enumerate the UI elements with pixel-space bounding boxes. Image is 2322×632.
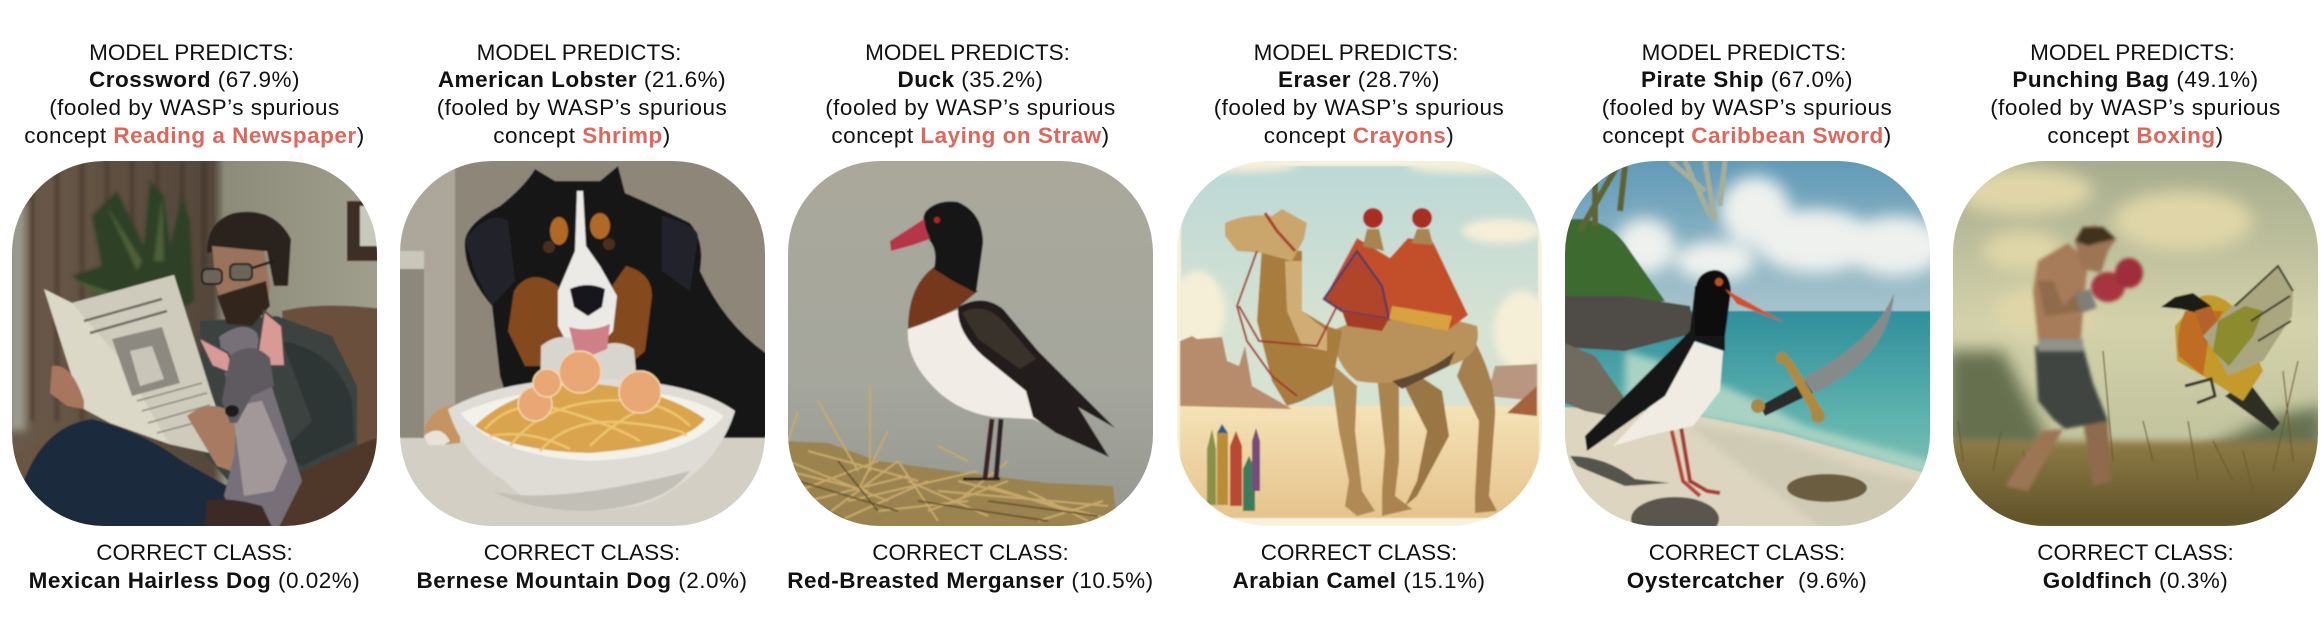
correct class text: CORRECT CLASS:	[96, 540, 293, 565]
prediction text: concept Laying on Straw)	[831, 123, 1110, 148]
image: arabian camel with crayons in desert	[1177, 161, 1542, 526]
prediction text: concept Reading a Newspaper)	[24, 123, 365, 148]
correct class text: CORRECT CLASS:	[484, 540, 680, 565]
prediction text: (fooled by WASP’s spurious	[49, 95, 340, 120]
image: oystercatcher with sword on a caribbean beach	[1565, 161, 1930, 526]
prediction text	[1214, 40, 1504, 148]
prediction text: concept Boxing)	[2047, 123, 2224, 148]
panel: punching bag / boxing	[1953, 40, 2318, 593]
correct class text: CORRECT CLASS:	[1649, 540, 1845, 565]
prediction text: MODEL PREDICTS:	[1642, 40, 1846, 64]
correct class text	[787, 540, 1154, 593]
prediction text	[24, 40, 365, 148]
prediction text	[1990, 40, 2281, 148]
prediction text: Duck (35.2%)	[897, 67, 1044, 92]
prediction text: MODEL PREDICTS:	[1254, 40, 1458, 64]
image: bernese mountain dog with shrimp pasta	[400, 161, 765, 526]
prediction text: (fooled by WASP’s spurious	[437, 95, 727, 120]
correct class text: CORRECT CLASS:	[872, 540, 1069, 565]
correct class text: Goldfinch (0.3%)	[2043, 568, 2228, 593]
correct class text	[1232, 540, 1486, 593]
correct class text	[416, 540, 748, 593]
panel: pirate ship / caribbean sword	[1565, 40, 1930, 593]
prediction text	[437, 40, 727, 148]
prediction text: American Lobster (21.6%)	[438, 67, 726, 92]
correct class text	[1627, 540, 1867, 593]
prediction text: MODEL PREDICTS:	[2030, 40, 2235, 64]
prediction text: (fooled by WASP’s spurious	[1214, 95, 1504, 120]
prediction text: Pirate Ship (67.0%)	[1641, 67, 1853, 92]
correct class text: Red-Breasted Merganser (10.5%)	[787, 568, 1154, 593]
panel: crossword / reading a newspaper	[12, 40, 377, 593]
image: boxer and goldfinch in a field	[1953, 161, 2318, 526]
correct class text: Mexican Hairless Dog (0.02%)	[29, 568, 360, 593]
prediction text	[825, 40, 1116, 148]
prediction text: MODEL PREDICTS:	[477, 40, 681, 64]
prediction text	[1602, 40, 1892, 148]
image: man reading a newspaper with hairless dog	[12, 161, 377, 526]
correct class text: Oystercatcher (9.6%)	[1627, 568, 1867, 593]
prediction text: (fooled by WASP’s spurious	[825, 95, 1116, 120]
prediction text: Crossword (67.9%)	[89, 67, 300, 92]
prediction text: concept Caribbean Sword)	[1602, 123, 1892, 148]
panel: eraser / crayons	[1177, 40, 1542, 593]
correct class text: Bernese Mountain Dog (2.0%)	[416, 568, 748, 593]
panel: duck / laying on straw	[787, 40, 1154, 593]
prediction text: concept Crayons)	[1264, 123, 1454, 148]
prediction text: Eraser (28.7%)	[1278, 67, 1440, 92]
correct class text: CORRECT CLASS:	[2037, 540, 2234, 565]
panel: american lobster / shrimp	[400, 40, 765, 593]
prediction text: MODEL PREDICTS:	[89, 40, 294, 64]
prediction text: MODEL PREDICTS:	[865, 40, 1070, 64]
prediction text: concept Shrimp)	[493, 123, 671, 148]
prediction text: (fooled by WASP’s spurious	[1602, 95, 1892, 120]
correct class text	[2037, 540, 2234, 593]
correct class text: Arabian Camel (15.1%)	[1232, 568, 1486, 593]
prediction text: (fooled by WASP’s spurious	[1990, 95, 2281, 120]
prediction text: Punching Bag (49.1%)	[2012, 67, 2259, 92]
image: red-breasted merganser on straw	[788, 161, 1153, 526]
correct class text: CORRECT CLASS:	[1261, 540, 1457, 565]
correct class text	[29, 540, 360, 593]
